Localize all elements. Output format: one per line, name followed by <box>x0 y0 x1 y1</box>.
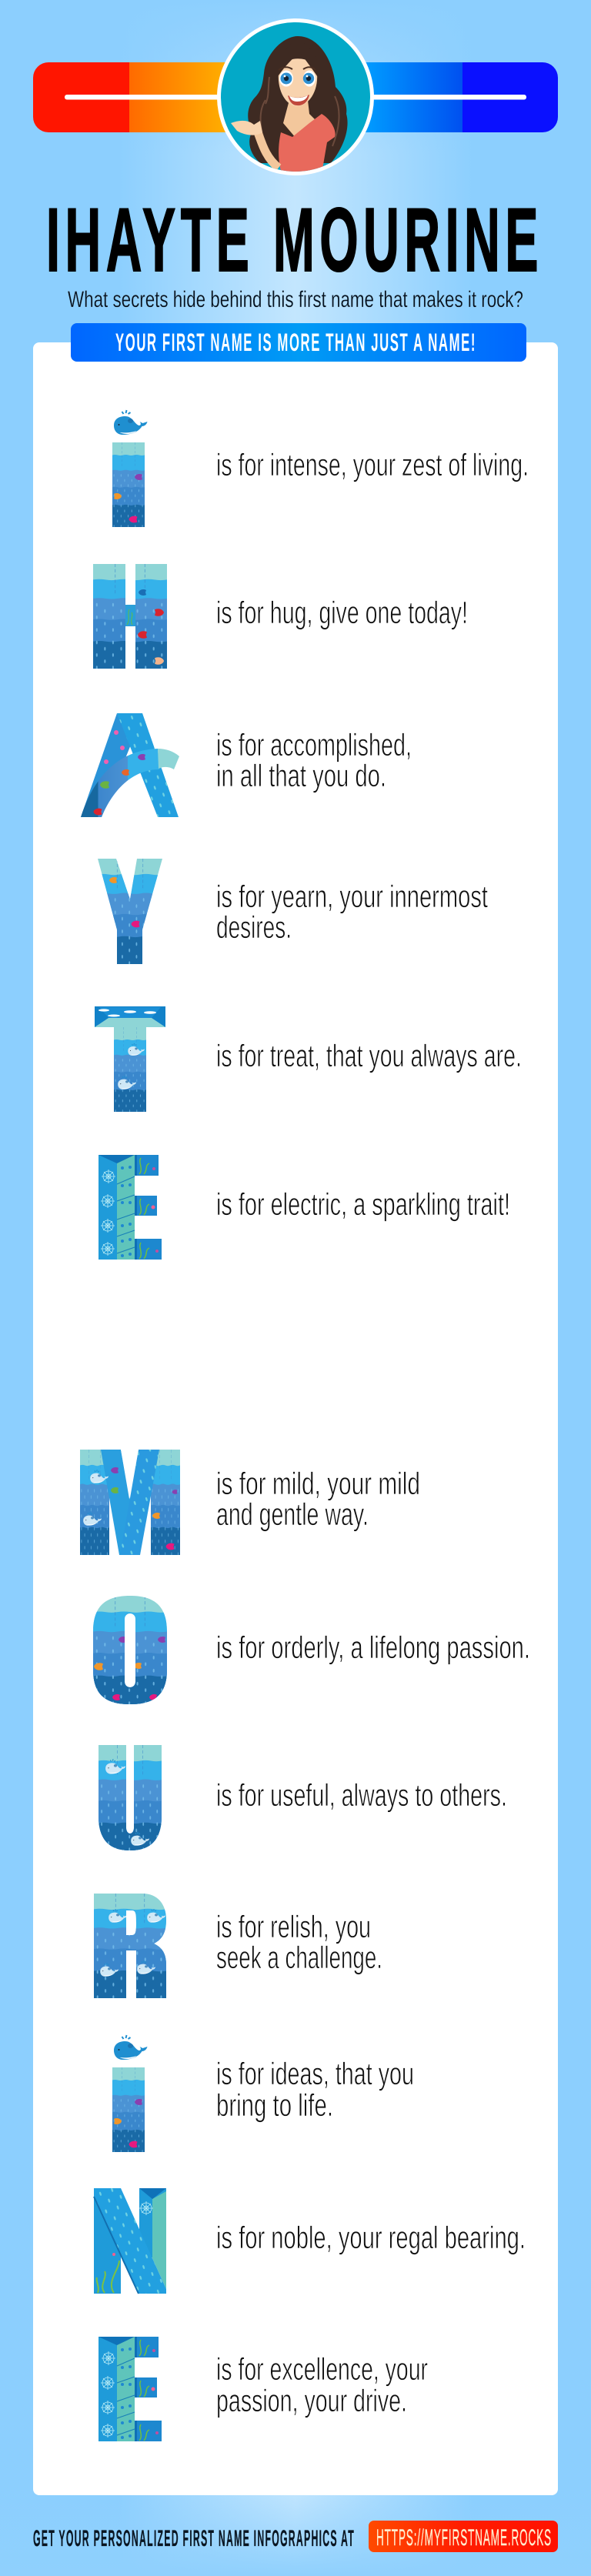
text: I second: is for ideas, that you <box>216 2056 414 2091</box>
letter M <box>80 1450 180 1555</box>
avatar portrait <box>217 18 374 175</box>
letter O <box>93 1596 167 1704</box>
text: R <box>216 1909 382 1975</box>
banner <box>71 323 526 362</box>
footer url button <box>369 2521 558 2552</box>
text: I second: bring to life. <box>216 2087 333 2123</box>
panel: white letters card <box>33 342 558 2495</box>
text: Y <box>216 879 488 945</box>
text: Y: is for yearn, your innermost <box>216 879 488 914</box>
text: R: is for relish, you <box>216 1909 371 1944</box>
text: A: in all that you do. <box>216 758 386 793</box>
text: M: is for mild, your mild <box>216 1466 420 1501</box>
letter E (second) <box>98 2337 162 2441</box>
letter H <box>93 564 167 669</box>
letter R <box>94 1894 166 1998</box>
text: A <box>216 727 412 793</box>
text: M: and gentle way. <box>216 1497 369 1532</box>
text: Y: desires. <box>216 909 292 945</box>
letter A <box>81 713 179 817</box>
text: E second: is for excellence, your <box>216 2351 428 2387</box>
letter Y <box>98 859 162 964</box>
letter U <box>98 1745 162 1850</box>
text: R: seek a challenge. <box>216 1940 382 1975</box>
text: M <box>216 1466 420 1532</box>
letter I (second) with whale <box>112 2035 148 2152</box>
text: A: is for accomplished, <box>216 727 412 762</box>
letter T <box>95 1006 165 1112</box>
text: I second <box>216 2056 414 2123</box>
letter E <box>98 1155 162 1260</box>
letter I with whale <box>112 410 148 527</box>
text: E second <box>216 2351 428 2418</box>
header color bar <box>33 62 558 132</box>
text: E second: passion, your drive. <box>216 2383 407 2418</box>
text: H: is for hug, give one today! <box>216 595 468 630</box>
letter N <box>94 2188 166 2294</box>
